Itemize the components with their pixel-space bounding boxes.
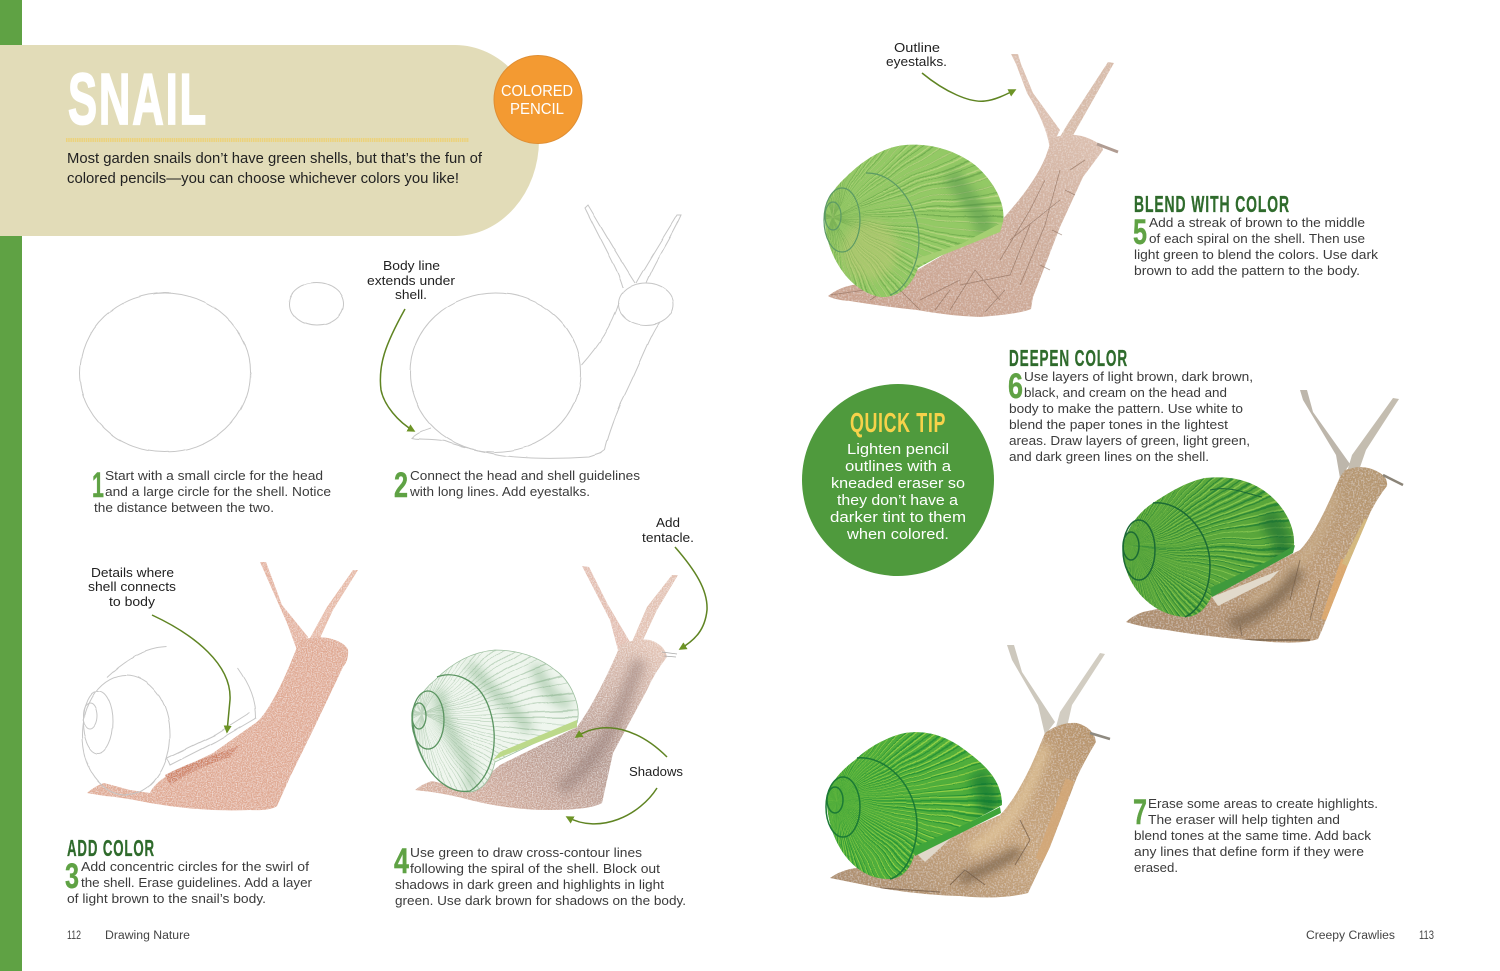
callout: shadows: Shadows: [629, 764, 683, 779]
step 4 text: Use green to draw cross-contour lines: [410, 845, 643, 860]
callout: outline eyestalks: Outline: [894, 40, 940, 55]
step 5 heading and text: BLEND WITH COLOR: [1134, 191, 1290, 217]
callout: outline eyestalks: [886, 40, 1015, 101]
callout: shell connection: to body: [109, 594, 156, 609]
step 5 heading and text: 5: [1133, 213, 1147, 252]
quick tip circle: Lighten pencil: [847, 441, 949, 458]
quick tip circle: kneaded eraser so: [831, 475, 965, 492]
footer left: 112: [67, 930, 81, 942]
intro text: [67, 150, 483, 187]
badge: colored pencil: [494, 56, 582, 144]
step 7 text: blend tones at the same time. Add back: [1134, 828, 1372, 843]
step 7 text: any lines that define form if they were: [1134, 844, 1364, 859]
panel: title banner: [0, 45, 539, 236]
step 3 heading and text: of light brown to the snail’s body.: [67, 891, 266, 906]
callout: shell connection: shell connects: [88, 579, 177, 594]
step 4 snail: [411, 566, 678, 810]
callout: add tentacle: tentacle.: [642, 530, 694, 545]
intro text: colored pencils—you can choose whichever colors you like!: [67, 170, 459, 187]
step 5 heading and text: of each spiral on the shell. Then use: [1149, 231, 1365, 246]
step 5 heading and text: Add a streak of brown to the middle: [1149, 215, 1365, 230]
step 1 text: and a large circle for the shell. Notice: [105, 484, 331, 499]
callout: add tentacle: Add: [656, 515, 680, 530]
step 7 text: The eraser will help tighten and: [1148, 812, 1340, 827]
arrow: [380, 309, 414, 431]
arrow: [576, 728, 667, 757]
badge: colored pencil: PENCIL: [510, 101, 564, 118]
step 3 heading and text: ADD COLOR: [67, 835, 155, 861]
footer right: [1306, 930, 1434, 942]
footer right: Creepy Crawlies: [1306, 930, 1395, 942]
step 1 text: the distance between the two.: [94, 500, 274, 515]
callout: body line: [367, 258, 456, 431]
step 1 text: Start with a small circle for the head: [105, 468, 323, 483]
arrow: [675, 547, 707, 649]
step 2 text: with long lines. Add eyestalks.: [409, 484, 590, 499]
callout: shell connection: [88, 565, 230, 732]
step 5 snail: [823, 54, 1118, 317]
step 6 heading and text: and dark green lines on the shell.: [1009, 449, 1209, 464]
quick tip circle: when colored.: [846, 526, 949, 543]
step 7 text: erased.: [1134, 860, 1178, 875]
callout: body line: extends under: [367, 273, 456, 288]
step 4 text: [394, 842, 686, 908]
callout: shadows: [567, 728, 683, 824]
quick tip circle: they don’t have a: [837, 492, 959, 509]
quick tip circle: QUICK TIP: [850, 407, 946, 438]
footer left: [67, 930, 190, 942]
step 4 text: green. Use dark brown for shadows on the body.: [395, 893, 686, 908]
step 1 sketch: circles: [80, 283, 344, 452]
step 7 text: Erase some areas to create highlights.: [1148, 796, 1378, 811]
quick tip circle: darker tint to them: [830, 509, 966, 526]
step 2 text: 2: [394, 466, 408, 505]
green page edge bar: [0, 0, 22, 971]
step 3 heading and text: 3: [65, 857, 79, 896]
step 3 heading and text: [65, 835, 313, 906]
badge: colored pencil: COLORED: [501, 83, 573, 100]
quick tip circle: [802, 384, 994, 576]
step 3 snail: [82, 562, 358, 810]
step 6 heading and text: [1008, 345, 1253, 464]
step 6 heading and text: areas. Draw layers of green, light green,: [1009, 433, 1250, 448]
step 5 heading and text: brown to add the pattern to the body.: [1134, 263, 1360, 278]
step 1 text: 1: [92, 466, 104, 505]
step 2 sketch: snail outline: [410, 205, 681, 458]
step 7 text: 7: [1133, 793, 1147, 832]
arrow: [567, 788, 657, 824]
step 6 heading and text: Use layers of light brown, dark brown,: [1024, 369, 1253, 384]
arrow: [922, 73, 1015, 101]
callout: shell connection: Details where: [91, 565, 174, 580]
intro text: Most garden snails don’t have green shells, but that’s the fun of: [67, 150, 483, 167]
step 4 text: shadows in dark green and highlights in light: [395, 877, 664, 892]
quick tip circle: outlines with a: [845, 458, 952, 475]
step 1 text: [92, 466, 331, 515]
step 6 heading and text: blend the paper tones in the lightest: [1009, 417, 1228, 432]
step 7 snail: [825, 645, 1110, 898]
callout: body line: shell.: [395, 287, 427, 302]
step 6 heading and text: 6: [1008, 367, 1023, 406]
step 5 heading and text: light green to blend the colors. Use dark: [1134, 247, 1379, 262]
step 2 text: [394, 466, 641, 505]
step 7 text: [1133, 793, 1378, 875]
step 5 heading and text: [1133, 191, 1379, 278]
arrow: [152, 615, 230, 732]
step 4 text: following the spiral of the shell. Block out: [410, 861, 660, 876]
callout: add tentacle: [642, 515, 707, 649]
footer left: Drawing Nature: [105, 930, 190, 942]
step 6 heading and text: black, and cream on the head and: [1024, 385, 1227, 400]
step 2 text: Connect the head and shell guidelines: [410, 468, 641, 483]
step 4 text: 4: [394, 842, 409, 881]
step 6 snail: [1122, 390, 1404, 643]
footer right: 113: [1419, 930, 1434, 942]
callout: body line: Body line: [383, 258, 440, 273]
step 3 heading and text: the shell. Erase guidelines. Add a layer: [81, 875, 313, 890]
callout: outline eyestalks: eyestalks.: [886, 54, 947, 69]
step 3 heading and text: Add concentric circles for the swirl of: [81, 859, 309, 874]
step 6 heading and text: DEEPEN COLOR: [1009, 345, 1128, 371]
title: SNAIL: [68, 60, 208, 140]
step 6 heading and text: body to make the pattern. Use white to: [1009, 401, 1243, 416]
